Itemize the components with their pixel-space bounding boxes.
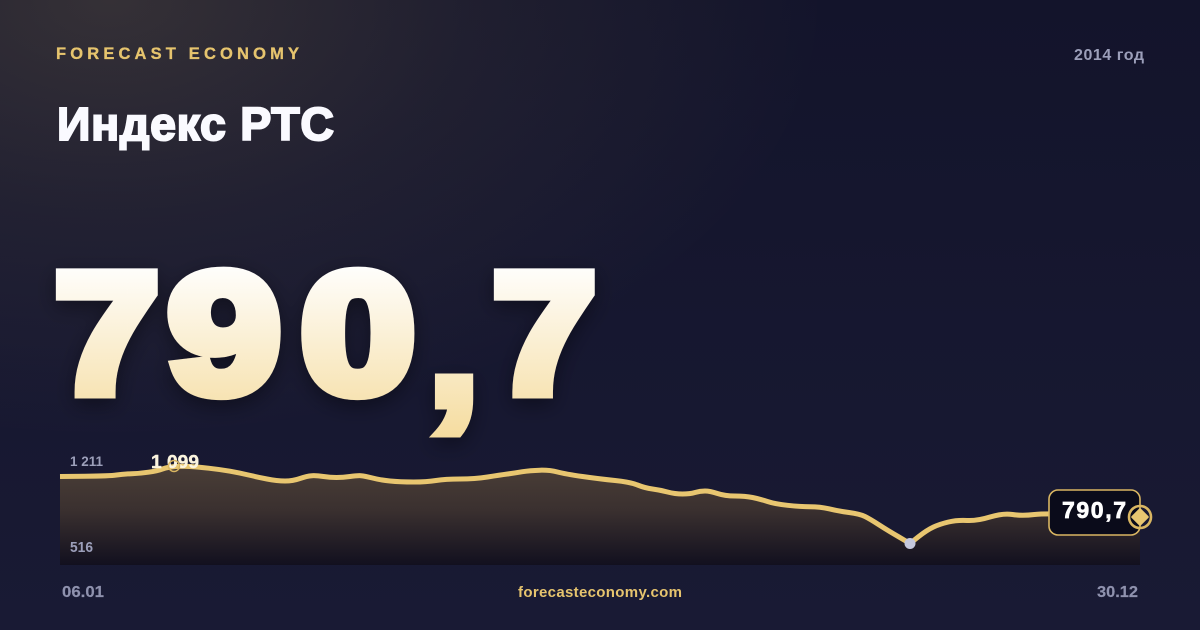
chart area fill <box>60 466 1140 565</box>
low marker <box>904 538 916 549</box>
title: Индекс РТС <box>57 98 334 150</box>
peak value label: 1 099 <box>151 452 199 472</box>
hero value: 7 <box>493 238 596 428</box>
year label: 2014 год <box>1074 47 1144 64</box>
axis max label: 1 211 <box>70 453 103 469</box>
source url: forecasteconomy.com <box>518 584 682 601</box>
peak marker <box>168 460 180 472</box>
hero value: 9 <box>168 238 280 428</box>
current marker <box>1129 506 1151 528</box>
hero value: 0 <box>301 238 415 428</box>
hero value: , <box>426 242 482 444</box>
current value callout <box>1049 490 1140 535</box>
hero value: 7 <box>55 238 159 428</box>
hero value <box>55 238 596 444</box>
end date: 30.12 <box>1097 584 1138 601</box>
chart line <box>60 466 1140 544</box>
current value callout: 790,7 <box>1062 497 1126 523</box>
line chart <box>60 452 1151 565</box>
axis min label: 516 <box>70 540 93 556</box>
brand label: FORECAST ECONOMY <box>56 45 299 63</box>
start date: 06.01 <box>62 584 104 601</box>
